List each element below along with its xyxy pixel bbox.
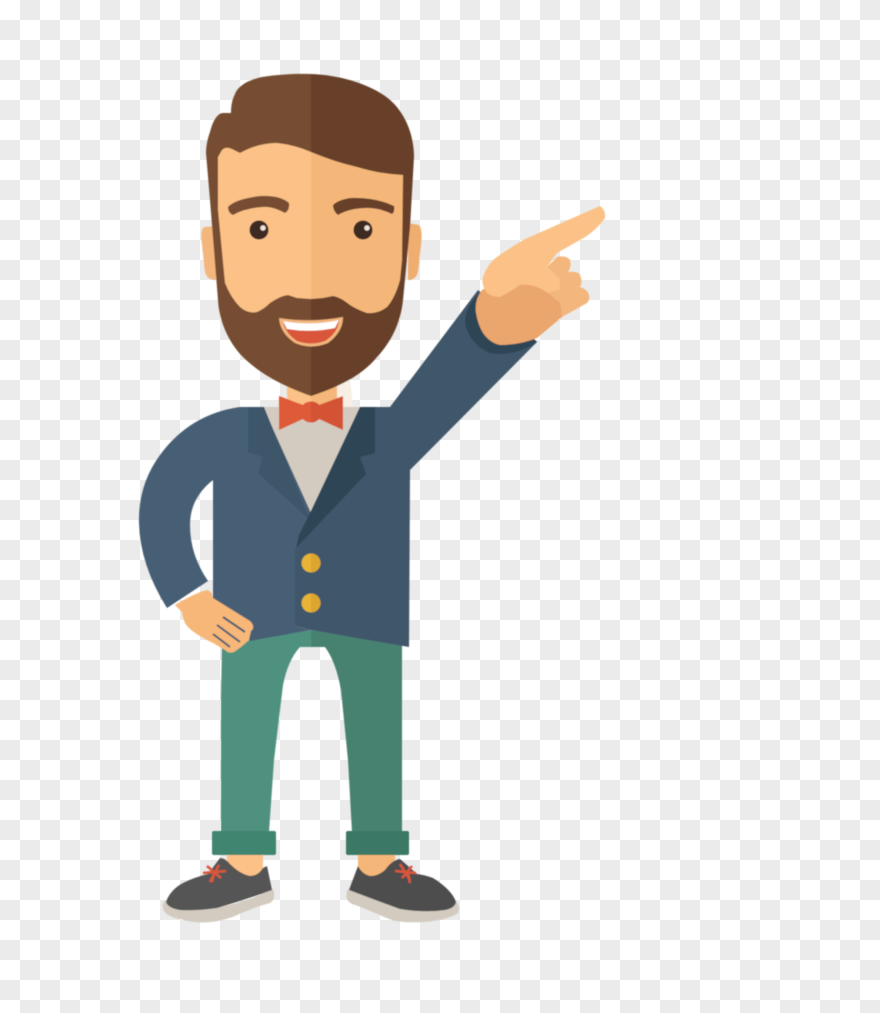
head: hair and beard bbox=[206, 74, 414, 396]
teeth bbox=[283, 320, 339, 331]
shirt bbox=[263, 407, 360, 513]
neck bbox=[287, 375, 353, 409]
ankles bbox=[227, 853, 395, 879]
right shoe bbox=[346, 859, 459, 922]
left lapel bbox=[248, 407, 310, 520]
palm bbox=[476, 280, 575, 345]
bow tie bbox=[279, 396, 343, 430]
trouser cuffs bbox=[212, 831, 409, 855]
jacket bbox=[139, 290, 537, 647]
jacket right side and raised arm bbox=[295, 290, 537, 647]
right shoe laces bbox=[395, 864, 416, 883]
eyes bbox=[250, 220, 372, 240]
left shoe laces bbox=[203, 865, 226, 882]
pointing hand bbox=[476, 206, 605, 345]
raised arm cuff bbox=[465, 290, 537, 354]
right lapel bbox=[296, 407, 375, 548]
left shoe bbox=[163, 858, 274, 922]
left leg and right leg of trousers bbox=[221, 630, 402, 832]
ears bbox=[201, 223, 422, 280]
jacket buttons bbox=[302, 554, 320, 612]
mouth bbox=[279, 317, 343, 346]
jacket left side and bent arm bbox=[139, 407, 311, 641]
face bbox=[218, 143, 403, 313]
hand on hip bbox=[175, 590, 253, 653]
curled fingers bbox=[547, 256, 589, 317]
character: pointing man bbox=[139, 74, 605, 922]
index finger and upper hand bbox=[482, 206, 605, 297]
eyebrows bbox=[228, 196, 394, 215]
